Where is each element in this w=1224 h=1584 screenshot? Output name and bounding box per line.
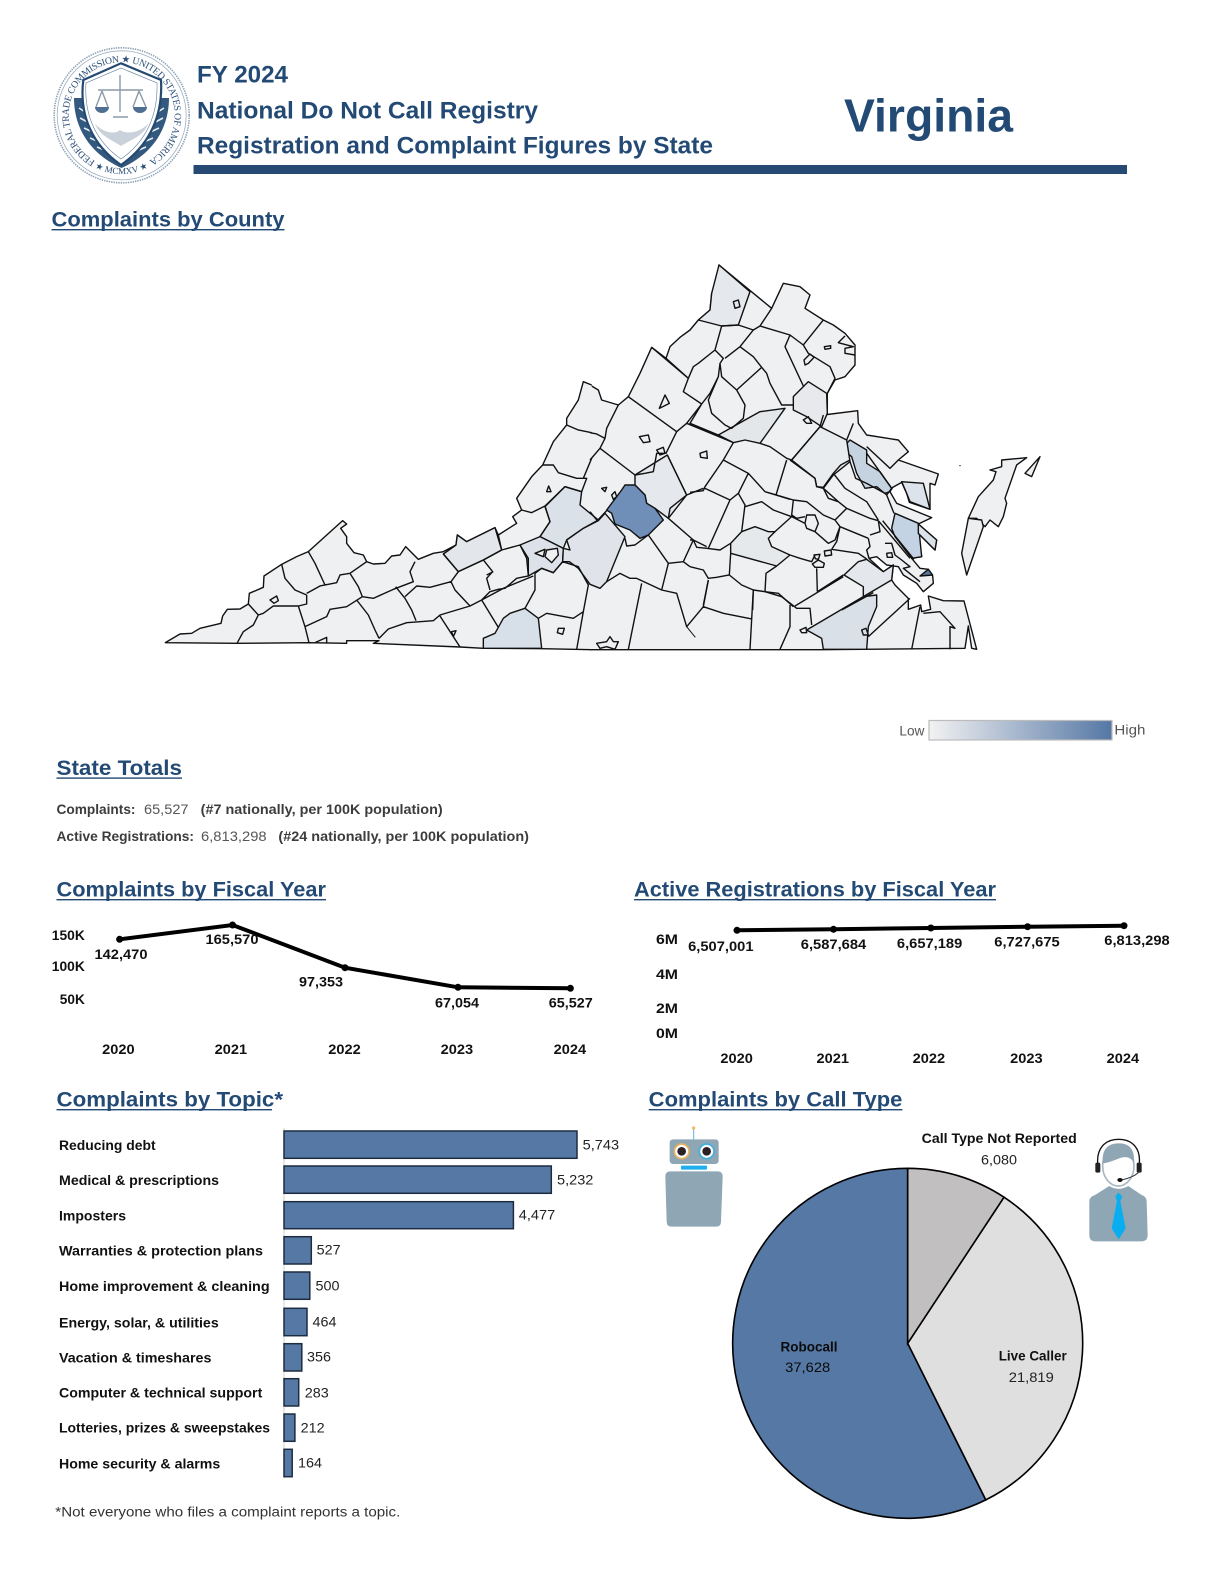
bar chart: complaints by topic: 500 bbox=[316, 1278, 340, 1293]
bar chart: complaints by topic: 164 bbox=[298, 1455, 323, 1470]
shaded counties east bbox=[607, 265, 937, 649]
map: Virginia counties bbox=[165, 265, 1040, 650]
heading: complaints by call type: Complaints by Call Type bbox=[649, 1088, 902, 1112]
line chart: complaints by fiscal year: 97,353 bbox=[299, 975, 344, 990]
line chart: complaints by fiscal year: 100K bbox=[52, 959, 85, 974]
line chart: complaints by fiscal year: 2022 bbox=[328, 1042, 361, 1057]
line chart: active registrations: 2M bbox=[656, 1001, 678, 1016]
line chart: complaints by fiscal year: 142,470 bbox=[94, 947, 148, 962]
icon: FTC seal: FEDERAL TRADE COMMISSION ★ UNITED STATES OF AMERICA bbox=[62, 56, 182, 166]
map central and tidewater counties bbox=[690, 460, 920, 610]
bar chart: complaints by topic: Medical & prescriptions bbox=[59, 1173, 219, 1188]
bar chart: complaints by topic: 464 bbox=[312, 1314, 337, 1329]
text block: state totals bbox=[56, 802, 529, 844]
bar chart: complaints by topic: Computer & technical support bbox=[59, 1386, 263, 1401]
line chart: complaints by fiscal year: 2020 bbox=[102, 1042, 135, 1057]
line chart: complaints by fiscal year: 50K bbox=[60, 992, 85, 1007]
line chart: complaints by fiscal year: 2021 bbox=[215, 1042, 248, 1057]
pie chart: complaints by call type bbox=[733, 1131, 1083, 1518]
line chart: complaints by fiscal year: 150K bbox=[52, 928, 85, 943]
pie label: robocall: Robocall bbox=[780, 1340, 838, 1355]
line chart: active registrations: 4M bbox=[656, 967, 678, 982]
legend: color scale bbox=[899, 720, 1145, 740]
pie label: robocall bbox=[780, 1340, 838, 1375]
bar chart: complaints by topic: Home improvement & cleaning bbox=[59, 1279, 270, 1294]
bar chart: complaints by topic: 5,743 bbox=[583, 1137, 619, 1152]
line chart: active registrations: 6M bbox=[656, 932, 678, 947]
pie label: robocall: 37,628 bbox=[785, 1360, 830, 1375]
line chart: complaints by fiscal year: 65,527 bbox=[549, 996, 593, 1011]
line chart: complaints by fiscal year bbox=[52, 922, 593, 1057]
shaded counties west bbox=[443, 487, 625, 648]
heading: complaints by topic: Complaints by Topic* bbox=[56, 1088, 284, 1112]
heading: state totals: State Totals bbox=[56, 756, 182, 780]
county lines east bbox=[590, 308, 955, 649]
icon: FTC seal: ★ MCMXV ★ bbox=[96, 164, 146, 174]
line chart: active registrations: 6,657,189 bbox=[897, 936, 962, 951]
text block: state totals: 65,527 bbox=[144, 802, 188, 817]
map east half bbox=[590, 265, 1040, 649]
map silhouette east bbox=[590, 265, 977, 650]
line chart: complaints by fiscal year: 165,570 bbox=[206, 932, 258, 947]
bar chart: complaints by topic: 527 bbox=[317, 1242, 341, 1257]
text block: state totals: Active Registrations: bbox=[56, 829, 194, 844]
icon: robot bbox=[665, 1126, 723, 1227]
line chart: active registrations: 2024 bbox=[1107, 1051, 1140, 1066]
heading: complaints by county: Complaints by County bbox=[52, 208, 285, 232]
line chart: active registrations: 6,813,298 bbox=[1104, 933, 1170, 948]
line chart: active registrations: 2022 bbox=[913, 1051, 945, 1066]
bar chart: complaints by topic: 283 bbox=[305, 1385, 329, 1400]
bar chart: complaints by topic bbox=[59, 1128, 619, 1478]
line chart: complaints by fiscal year: 2023 bbox=[441, 1042, 474, 1057]
legend: color scale: High bbox=[1114, 722, 1145, 737]
title: report heading: FY 2024 bbox=[197, 61, 289, 88]
bar chart: complaints by topic: 4,477 bbox=[519, 1207, 555, 1222]
pie label: call type not reported bbox=[922, 1131, 1077, 1167]
text block: state totals: 6,813,298 bbox=[201, 829, 267, 844]
line chart: complaints by fiscal year: 67,054 bbox=[435, 996, 480, 1011]
bar chart: complaints by topic: Home security & alarms bbox=[59, 1457, 220, 1472]
bar chart: complaints by topic: Imposters bbox=[59, 1209, 126, 1224]
header rule bbox=[194, 165, 1127, 174]
bar chart: complaints by topic: Lotteries, prizes & sweepstakes bbox=[59, 1421, 270, 1436]
line chart: active registrations: 6,587,684 bbox=[801, 937, 867, 952]
line chart: active registrations: 2020 bbox=[720, 1051, 753, 1066]
title: state name: Virginia bbox=[844, 90, 1013, 142]
heading: active registrations by fiscal year: Active Registrations by Fiscal Year bbox=[634, 878, 997, 902]
bar chart: complaints by topic: Reducing debt bbox=[59, 1138, 156, 1153]
heading: complaints by fiscal year: Complaints by Fiscal Year bbox=[56, 878, 327, 902]
title: report heading: Registration and Complaint Figures by State bbox=[197, 132, 713, 159]
bar chart: complaints by topic: Vacation & timeshares bbox=[59, 1351, 211, 1366]
line chart: active registrations: 6,727,675 bbox=[994, 935, 1060, 950]
independent cities east bbox=[597, 300, 868, 649]
bar chart: complaints by topic: 212 bbox=[301, 1420, 325, 1435]
pie label: call type not reported: Call Type Not Reported bbox=[922, 1131, 1077, 1146]
bar chart: complaints by topic: 5,232 bbox=[557, 1172, 593, 1187]
eastern shore bbox=[959, 457, 1040, 575]
county lines west bbox=[237, 425, 592, 649]
pie label: live caller bbox=[999, 1349, 1067, 1385]
line chart: active registrations: 2021 bbox=[816, 1051, 850, 1066]
bar chart: complaints by topic: Energy, solar, & utilities bbox=[59, 1316, 219, 1331]
line chart: active registrations bbox=[656, 922, 1170, 1066]
bar chart: complaints by topic: Warranties & protection plans bbox=[59, 1244, 263, 1259]
icon: live caller agent bbox=[1089, 1139, 1148, 1241]
line chart: active registrations: 0M bbox=[656, 1026, 678, 1041]
pie label: live caller: 21,819 bbox=[1009, 1370, 1054, 1385]
text block: state totals: (#24 nationally, per 100K population) bbox=[278, 829, 529, 844]
title: report heading: National Do Not Call Registry bbox=[197, 97, 539, 124]
line chart: active registrations: 6,507,001 bbox=[688, 939, 754, 954]
text block: state totals: Complaints: bbox=[56, 802, 136, 817]
bar chart: complaints by topic: 356 bbox=[307, 1349, 331, 1364]
legend: color scale: Low bbox=[899, 724, 925, 739]
line chart: complaints by fiscal year: 2024 bbox=[554, 1042, 587, 1057]
title: report heading bbox=[197, 61, 713, 159]
pie label: live caller: Live Caller bbox=[999, 1349, 1067, 1364]
footnote: *Not everyone who files a complaint reports a topic. bbox=[55, 1505, 400, 1520]
map west half bbox=[165, 382, 625, 650]
pie label: call type not reported: 6,080 bbox=[981, 1152, 1017, 1167]
text block: state totals: (#7 nationally, per 100K population) bbox=[201, 802, 443, 817]
line chart: active registrations: 2023 bbox=[1010, 1051, 1043, 1066]
